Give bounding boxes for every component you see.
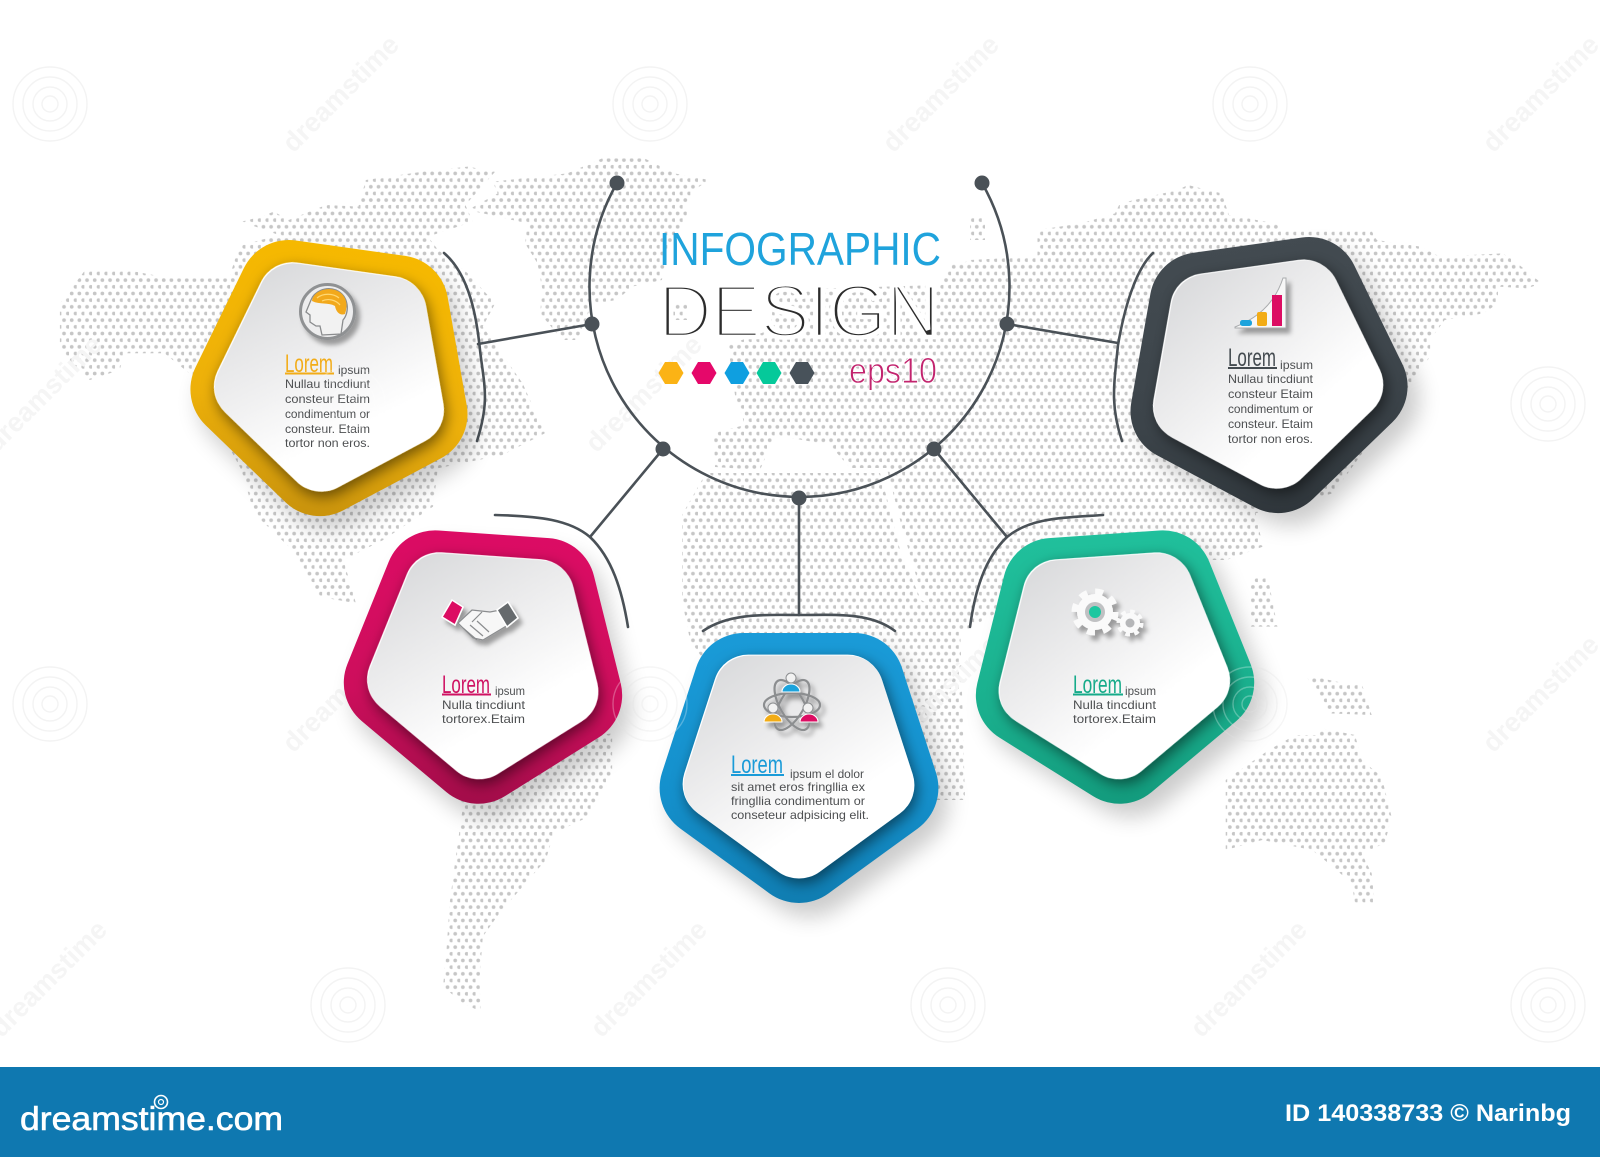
yellow panel text: tortor non eros. <box>285 436 370 450</box>
dark panel text: Lorem <box>1228 344 1276 372</box>
icon: handshake <box>442 600 518 640</box>
yellow panel text: Lorem <box>285 350 333 378</box>
watermark layer: dreamstime <box>276 629 405 758</box>
green panel text: Nulla tincdiunt <box>1073 698 1157 712</box>
footer logo: dreamstime.com <box>20 1100 283 1137</box>
green pentagon shape <box>1019 577 1220 774</box>
panel: blue pentagon <box>710 673 898 867</box>
watermark layer: dreamstime <box>876 629 1005 758</box>
magenta pentagon shape <box>388 578 589 775</box>
watermark layer: dreamstime <box>276 29 405 158</box>
watermark layer: dreamstime <box>579 329 708 458</box>
dark panel text: consteur. Etaim <box>1228 417 1313 431</box>
dark panel text: tortor non eros. <box>1228 432 1313 446</box>
title: INFOGRAPHIC: INFOGRAPHIC <box>659 223 941 275</box>
title: DESIGN: DESIGN <box>658 269 940 353</box>
green panel text: ipsum <box>1125 684 1156 698</box>
yellow panel text: ipsum <box>338 363 370 377</box>
magenta panel text: ipsum <box>495 684 525 698</box>
magenta panel text: tortorex.Etaim <box>442 712 525 726</box>
green panel text <box>1073 671 1157 726</box>
watermark layer: dreamstime <box>1184 914 1313 1043</box>
blue pentagon shape <box>710 683 898 867</box>
icon: rising bar chart <box>1235 278 1286 328</box>
dark panel text <box>1228 344 1314 446</box>
panel: magenta pentagon <box>388 578 589 775</box>
watermark layer: dreamstime <box>876 29 1005 158</box>
magenta panel text: Nulla tincdiunt <box>442 698 526 712</box>
icon: brain head <box>300 284 354 338</box>
blue panel text: ipsum el dolor <box>790 767 864 781</box>
blue panel text: conseteur adpisicing elit. <box>731 808 869 822</box>
yellow panel text: Nullau tincdiunt <box>285 377 371 391</box>
magenta panel text: Lorem <box>442 671 490 699</box>
yellow panel text: condimentum or <box>285 407 370 421</box>
panel: dark grey pentagon <box>1166 278 1378 489</box>
dark panel text: consteur Etaim <box>1228 387 1313 401</box>
watermark overlay on panels <box>311 367 1287 741</box>
green panel text: tortorex.Etaim <box>1073 712 1156 726</box>
dark pentagon shape <box>1166 281 1378 489</box>
dark panel text: Nullau tincdiunt <box>1228 372 1314 386</box>
panel: green pentagon <box>1019 577 1220 774</box>
watermark layer: dreamstime <box>584 914 713 1043</box>
green panel text: Lorem <box>1073 671 1122 699</box>
yellow panel text: consteur Etaim <box>285 392 370 406</box>
yellow panel text: consteur. Etaim <box>285 422 370 436</box>
magenta panel text <box>442 671 526 726</box>
blue panel text: Lorem <box>731 751 783 779</box>
blue panel text <box>731 751 869 822</box>
footer bar <box>0 1067 1600 1157</box>
panel: yellow pentagon <box>230 284 442 492</box>
yellow pentagon shape <box>230 285 442 492</box>
dark panel text: condimentum or <box>1228 402 1313 416</box>
footer image id: ID 140338733 © Narinbg <box>1285 1100 1571 1127</box>
blue panel text: sit amet eros fringllia ex <box>731 780 865 794</box>
central arc with connectors <box>444 176 1153 631</box>
icon: atom of people <box>764 673 820 735</box>
icon: gears <box>1074 592 1142 634</box>
eps10 label: eps10 <box>849 350 937 391</box>
dotted world map <box>60 158 1538 1009</box>
colour hexagon row <box>658 362 814 384</box>
blue panel text: fringllia condimentum or <box>731 794 865 808</box>
yellow panel text <box>285 350 371 450</box>
dark panel text: ipsum <box>1280 358 1313 372</box>
